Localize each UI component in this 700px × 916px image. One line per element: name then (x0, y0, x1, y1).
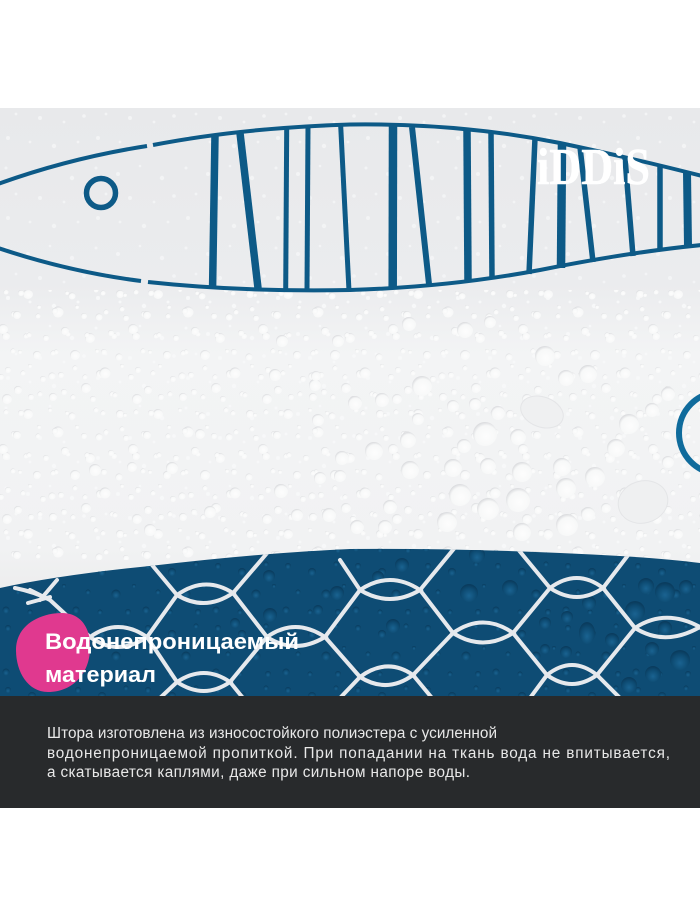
droplet field on the white fabric (0, 290, 700, 560)
heading (45, 629, 299, 687)
description line 1: Штора изготовлена из износостойкого полиэстера с усиленной (47, 725, 497, 742)
fabric base (0, 108, 700, 588)
heading line 2: материал (45, 662, 156, 687)
description line 3: а скатывается каплями, даже при сильном напоре воды. (47, 764, 470, 781)
fish body contour (0, 124, 700, 290)
panel: wet fabric photo (0, 108, 700, 698)
fish eye (86, 178, 116, 208)
pink accent blob (16, 613, 90, 692)
description line 2: водонепроницаемой пропиткой. При попадании на ткань вода не впитывается, (47, 745, 670, 762)
panel: description band (0, 696, 700, 808)
net pattern (15, 545, 700, 698)
fish body stripes (213, 126, 688, 291)
blue fabric base (0, 540, 700, 696)
large water droplets (89, 316, 675, 541)
illustration: second fish eye ring (679, 392, 700, 474)
pale merged droplets (520, 396, 668, 524)
blue fabric large droplets (230, 547, 693, 693)
heading line 1: Водонепроницаемый (45, 629, 299, 654)
description text (47, 725, 670, 781)
blue fabric small droplets (0, 540, 700, 696)
droplets over the upper fabric (4, 113, 695, 282)
brand logo: iDDiS (537, 139, 650, 196)
panel: blue fabric with net pattern (0, 540, 700, 698)
illustration: fish outline (0, 124, 700, 291)
